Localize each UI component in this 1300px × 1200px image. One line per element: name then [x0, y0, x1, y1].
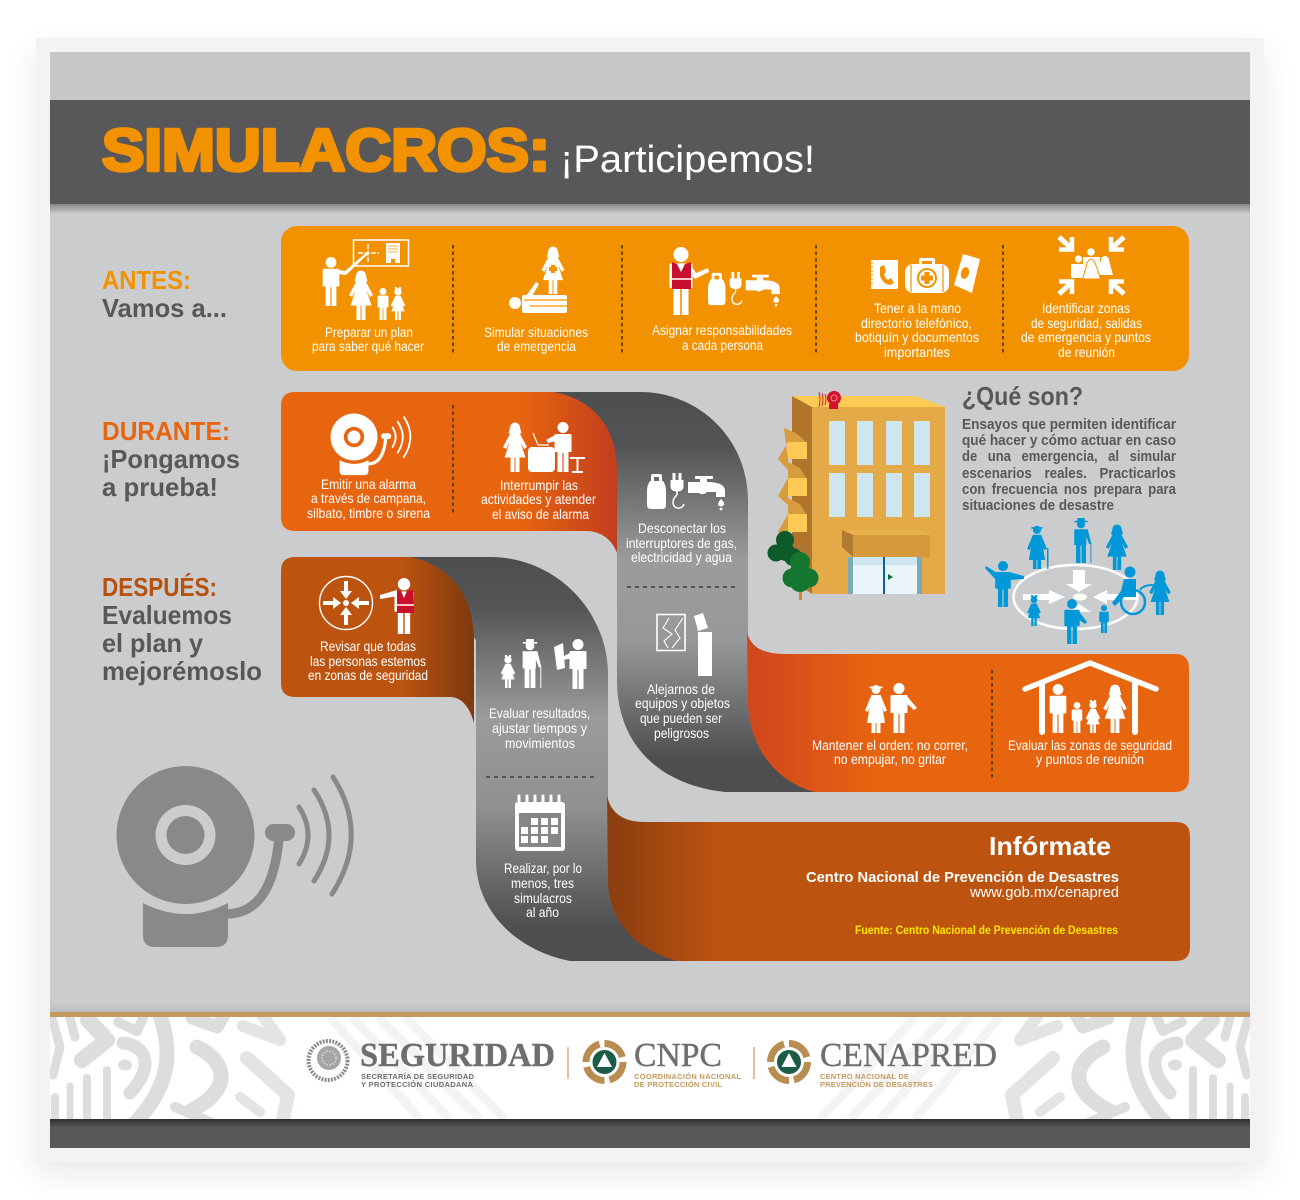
- panel: despues: [281, 557, 474, 723]
- icon: alarm bell small: [331, 414, 410, 475]
- logo: cenapred: PREVENCIÓN DE DESASTRES: [820, 1080, 933, 1089]
- logo: cnpc: CNPC: [634, 1037, 722, 1074]
- text: alejarnos: que pueden ser: [640, 710, 722, 726]
- text: identificar zonas: Identificar zonas: [1042, 300, 1130, 316]
- ribbon: gray durante: [553, 392, 815, 792]
- text: evaluar zonas: Evaluar las zonas de seguridad: [1008, 737, 1172, 753]
- text: evaluar resultados: ajustar tiempos y: [492, 720, 587, 736]
- text: emitir alarma: [307, 476, 430, 521]
- text: simular: [484, 324, 588, 354]
- logo: cenapred: CENTRO NACIONAL DE: [820, 1072, 909, 1081]
- text: emitir alarma: Emitir una alarma: [321, 476, 416, 492]
- text: asignar: [652, 322, 792, 353]
- icon: keep order: [865, 683, 917, 733]
- text: evaluar zonas: y puntos de reunión: [1036, 751, 1144, 767]
- text: identificar zonas: [1021, 300, 1151, 360]
- heading: despues: Evaluemos: [102, 600, 232, 630]
- icon: directory, kit and documents: [870, 254, 980, 293]
- text: realizar: simulacros: [514, 890, 572, 906]
- text: desconectar: interruptores de gas,: [626, 535, 737, 551]
- logo: cnpc: COORDINACIÓN NACIONAL: [634, 1072, 741, 1081]
- logo: seguridad: Y PROTECCIÓN CIUDADANA: [361, 1080, 474, 1089]
- text: plan: Preparar un plan: [325, 324, 413, 340]
- icon: evacuation circle of people: [985, 518, 1171, 644]
- panel: durante orden: [747, 632, 1189, 792]
- text: revisar: Revisar que todas: [320, 638, 416, 654]
- heading: despues: [102, 572, 262, 686]
- text: mantener orden: [812, 737, 968, 767]
- text: identificar zonas: de emergencia y puntos: [1021, 329, 1151, 345]
- panel: informate: [607, 795, 1190, 961]
- text: interrumpir: [481, 477, 596, 522]
- heading: antes: [102, 265, 227, 323]
- text: asignar: Asignar responsabilidades: [652, 322, 792, 338]
- text: realizar: menos, tres: [511, 875, 574, 891]
- text: tener a la mano: Tener a la mano: [874, 300, 961, 316]
- heading: durante: [102, 416, 240, 502]
- footer: [50, 1002, 1250, 1148]
- icon: building: [768, 391, 945, 600]
- text: tener a la mano: botiquín y documentos: [855, 329, 979, 345]
- informate block: Infórmate: [989, 831, 1111, 861]
- text: alejarnos: [635, 681, 730, 741]
- text: mantener orden: no empujar, no gritar: [834, 751, 946, 767]
- text: simular: Simular situaciones: [484, 324, 588, 340]
- icon: interrupt activities: [503, 422, 585, 472]
- text: plan: [312, 324, 424, 354]
- heading: antes: Vamos a...: [102, 293, 227, 323]
- text: interrumpir: actividades y atender: [481, 491, 596, 507]
- logo: cenapred: [770, 1037, 997, 1089]
- text block: que son: con frecuencia nos prepara para: [962, 481, 1177, 498]
- text: alejarnos: equipos y objetos: [635, 695, 730, 711]
- icon: first aid drill: [509, 246, 567, 313]
- logo: cnpc: [586, 1037, 741, 1089]
- logo: seguridad: SEGURIDAD: [360, 1037, 555, 1074]
- text: plan: para saber qué hacer: [312, 338, 424, 354]
- text block: que son: qué hacer y cómo actuar en caso: [962, 432, 1176, 449]
- title: [102, 118, 815, 184]
- icon: meeting point: [1059, 237, 1124, 294]
- text: revisar: las personas estemos: [310, 653, 426, 669]
- text: desconectar: electricidad y agua: [631, 549, 732, 565]
- text block: que son: Ensayos que permiten identificar: [962, 416, 1176, 433]
- text: evaluar zonas: [1008, 737, 1172, 767]
- heading: durante: DURANTE:: [102, 416, 230, 446]
- text block: que son: situaciones de desastre: [962, 497, 1114, 514]
- logo: seguridad: SECRETARÍA DE SEGURIDAD: [361, 1072, 475, 1081]
- icon: safety zone check: [320, 576, 414, 634]
- icon: broken glass and column: [657, 613, 712, 676]
- text: revisar: en zonas de seguridad: [308, 667, 428, 683]
- text: realizar: al año: [526, 904, 559, 920]
- logo: cenapred: CENAPRED: [820, 1037, 997, 1074]
- icon: big alarm bell: [116, 766, 351, 947]
- text: desconectar: [626, 520, 737, 565]
- heading: antes: ANTES:: [102, 265, 191, 295]
- icon: plan: [323, 240, 408, 320]
- text: mantener orden: Mantener el orden: no correr,: [812, 737, 968, 753]
- text: realizar: Realizar, por lo: [504, 860, 582, 876]
- text: tener a la mano: directorio telefónico,: [861, 315, 972, 331]
- logo: seguridad: [306, 1037, 555, 1089]
- text: tener a la mano: [855, 300, 979, 360]
- icon: calendar: [515, 796, 565, 851]
- panel: antes: [281, 226, 1189, 371]
- heading: despues: mejorémoslo: [102, 656, 262, 686]
- text: simular: de emergencia: [497, 338, 576, 354]
- informate block: Fuente: Centro Nacional de Prevención de Desastres: [855, 925, 1118, 937]
- text block: que son: de una emergencia, al simular: [962, 448, 1176, 465]
- text block: que son: [962, 416, 1177, 514]
- header band: [50, 100, 1250, 214]
- text: realizar: [504, 860, 582, 920]
- logo: cnpc: DE PROTECCIÓN CIVIL: [634, 1080, 722, 1089]
- text: evaluar resultados: movimientos: [505, 735, 575, 751]
- icon: family under shelter: [1025, 663, 1156, 733]
- text: alejarnos: peligrosos: [654, 725, 709, 741]
- informate block: Centro Nacional de Prevención de Desastres: [806, 869, 1119, 886]
- icon: gas, power and water: [647, 473, 725, 510]
- text: emitir alarma: silbato, timbre o sirena: [307, 505, 430, 521]
- text: identificar zonas: de seguridad, salidas: [1031, 315, 1142, 331]
- text block: que son: escenarios reales. Practicarlos: [962, 465, 1176, 482]
- heading: despues: el plan y: [102, 628, 204, 658]
- heading: que son: ¿Qué son?: [962, 381, 1083, 411]
- text: interrumpir: Interrumpir las: [500, 477, 578, 493]
- text: alejarnos: Alejarnos de: [647, 681, 715, 697]
- text: evaluar resultados: Evaluar resultados,: [489, 705, 590, 721]
- heading: durante: ¡Pongamos: [102, 444, 240, 474]
- text: identificar zonas: de reunión: [1058, 344, 1115, 360]
- informate block: [806, 831, 1119, 937]
- text: revisar: [308, 638, 428, 683]
- title: ¡Participemos!: [560, 139, 815, 181]
- text: asignar: a cada persona: [682, 337, 763, 353]
- title: SIMULACROS:: [102, 118, 550, 184]
- icon: evaluate results: [501, 639, 586, 689]
- top band: [50, 52, 1250, 100]
- text: desconectar: Desconectar los: [638, 520, 726, 536]
- informate block: www.gob.mx/cenapred: [969, 884, 1119, 901]
- heading: durante: a prueba!: [102, 472, 218, 502]
- text: evaluar resultados: [489, 705, 590, 751]
- panel: durante: [281, 392, 617, 553]
- text: emitir alarma: a través de campana,: [311, 490, 426, 506]
- heading: despues: DESPUÉS:: [102, 572, 217, 602]
- text: interrumpir: el aviso de alarma: [492, 506, 589, 522]
- ribbon: gray despues: [410, 557, 677, 961]
- text: tener a la mano: importantes: [884, 344, 950, 360]
- icon: responsible with vest: [669, 247, 780, 315]
